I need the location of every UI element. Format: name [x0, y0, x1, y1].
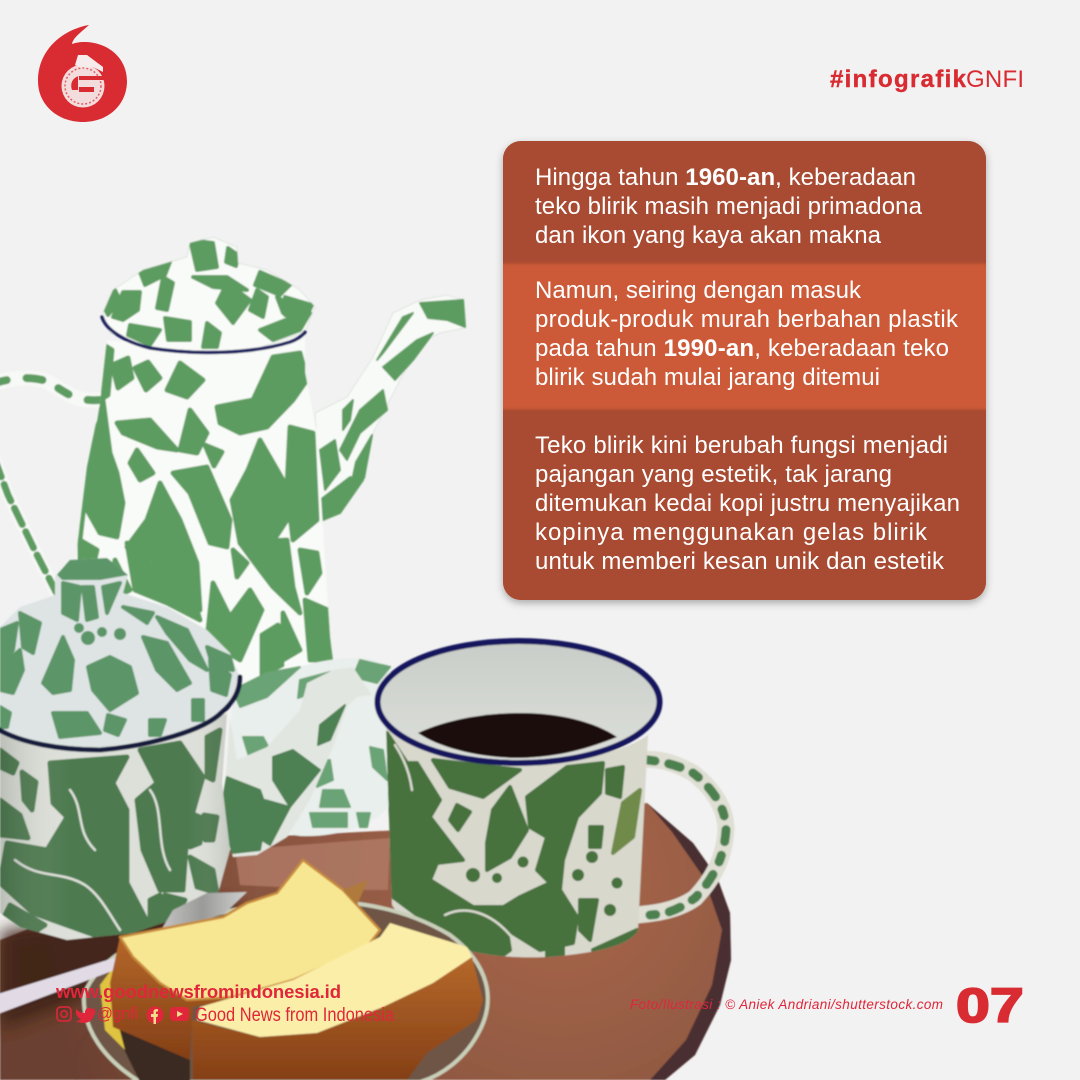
icon: facebook	[146, 1006, 164, 1024]
panel bands	[495, 135, 995, 606]
coffee pot body	[70, 335, 334, 690]
wooden tray	[0, 803, 731, 1080]
plate with spoon	[0, 892, 488, 1080]
channel name: Good News from Indonesia	[195, 1005, 394, 1026]
small teapot lid	[0, 558, 240, 750]
icon: instagram	[57, 1007, 71, 1021]
icon: twitter	[76, 1008, 96, 1023]
cake slice: back crumb	[120, 860, 380, 1000]
mug rim and coffee	[378, 641, 660, 763]
social media row	[57, 1004, 394, 1026]
panel block 3 text: untuk memberi kesan unik dan estetik	[535, 548, 945, 575]
social handle: @gnfi	[97, 1004, 138, 1023]
photo credit: Foto/Ilustrasi : © Aniek Andriani/shutterstock.com	[630, 997, 943, 1012]
panel block 1 text: dan ikon yang kaya akan makna	[535, 222, 882, 249]
panel block 2 text: Namun, seiring dengan masuk	[535, 277, 862, 304]
hashtag: GNFI	[966, 66, 1024, 93]
text panel	[495, 135, 995, 606]
marble veins	[395, 745, 510, 935]
icon: youtube	[170, 1007, 189, 1021]
cake crest	[343, 880, 368, 905]
cake slice: front crust	[192, 957, 483, 1080]
photo: enamel coffee set on wooden tray	[0, 237, 731, 1080]
website url: www.goodnewsfromindonesia.id	[55, 981, 341, 1002]
panel block 2 text	[535, 277, 959, 391]
logo	[38, 25, 127, 122]
marble veins	[15, 790, 170, 930]
cake slice: back crust	[110, 933, 380, 1060]
panel block 2 text: pada tahun 1990-an, keberadaan teko	[535, 335, 949, 362]
coffee pot lid	[102, 237, 315, 353]
small teapot spout	[220, 667, 372, 857]
panel block 1 text: Hingga tahun 1960-an, keberadaan	[535, 164, 916, 191]
cake slice: front crumb	[197, 923, 472, 1037]
cake slices	[110, 860, 483, 1080]
coffee pot spout	[315, 295, 465, 522]
panel block 3 text: Teko blirik kini berubah fungsi menjadi	[535, 432, 948, 459]
hashtag: #infografik	[830, 66, 967, 93]
panel block 1 text: teko blirik masih menjadi primadona	[535, 193, 923, 220]
page number: 07	[956, 978, 1024, 1032]
panel block 1 text	[535, 164, 923, 249]
panel block 3 text: pajangan yang estetik, tak jarang	[535, 461, 892, 488]
mug handle	[626, 759, 726, 916]
panel block 3 text: kopinya menggunakan gelas blirik	[535, 519, 928, 546]
mug body	[386, 725, 648, 970]
panel block 2 text: produk-produk murah berbahan plastik	[535, 306, 959, 333]
panel block 3 text: ditemukan kedai kopi justru menyajikan	[535, 490, 960, 517]
leaning lid behind teapot	[232, 658, 392, 836]
panel block 3 text	[535, 432, 960, 575]
panel block 2 text: blirik sudah mulai jarang ditemui	[535, 364, 880, 391]
panel base	[503, 141, 986, 600]
small teapot body	[0, 712, 235, 945]
logo emblem	[62, 55, 104, 108]
coffee pot handle	[0, 378, 100, 592]
